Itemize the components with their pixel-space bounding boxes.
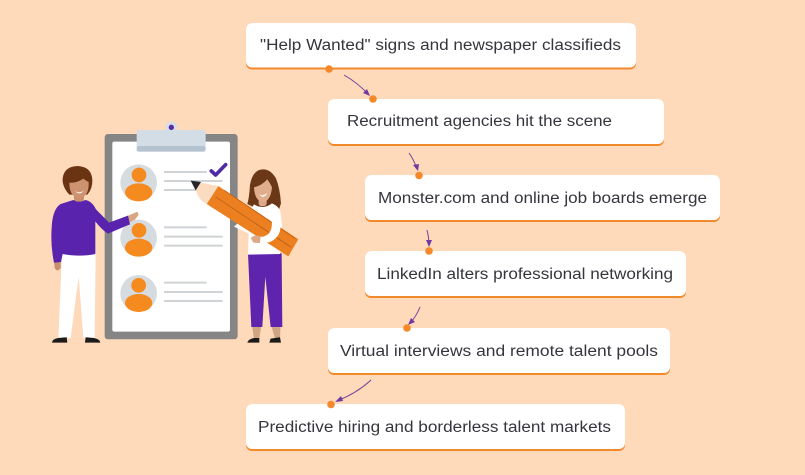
step 6 card [246, 401, 625, 451]
profile row 2 [120, 220, 223, 257]
step 5 card [328, 324, 670, 375]
step 3 connector arrow [426, 230, 432, 247]
woman's arm over pencil [251, 209, 281, 243]
step 1 card [246, 23, 636, 70]
step 4 connector arrow [408, 307, 420, 325]
profile row 3 [120, 275, 223, 312]
step 2 connector arrow [409, 153, 419, 171]
step 1 connector arrow [325, 65, 370, 96]
step 1 card: "Help Wanted" signs and newspaper classifieds [260, 37, 621, 54]
step 5 card: Virtual interviews and remote talent pools [340, 343, 658, 360]
step 2 card [328, 95, 664, 146]
step 4 card: LinkedIn alters professional networking [377, 266, 673, 283]
icon: check mark [211, 165, 226, 175]
step 3 card [365, 172, 720, 222]
profile row 1 [120, 164, 223, 201]
step 3 card: Monster.com and online job boards emerge [378, 190, 707, 207]
illustration: clipboard with two people [51, 122, 298, 343]
step 2 card: Recruitment agencies hit the scene [347, 113, 612, 130]
clipboard [105, 122, 238, 339]
man presenting [51, 166, 139, 343]
step 5 connector arrow [335, 380, 371, 402]
woman holding pencil [234, 169, 282, 343]
icon: giant pencil [191, 181, 298, 256]
step 6 card: Predictive hiring and borderless talent markets [258, 419, 611, 436]
step 4 card [365, 247, 686, 298]
